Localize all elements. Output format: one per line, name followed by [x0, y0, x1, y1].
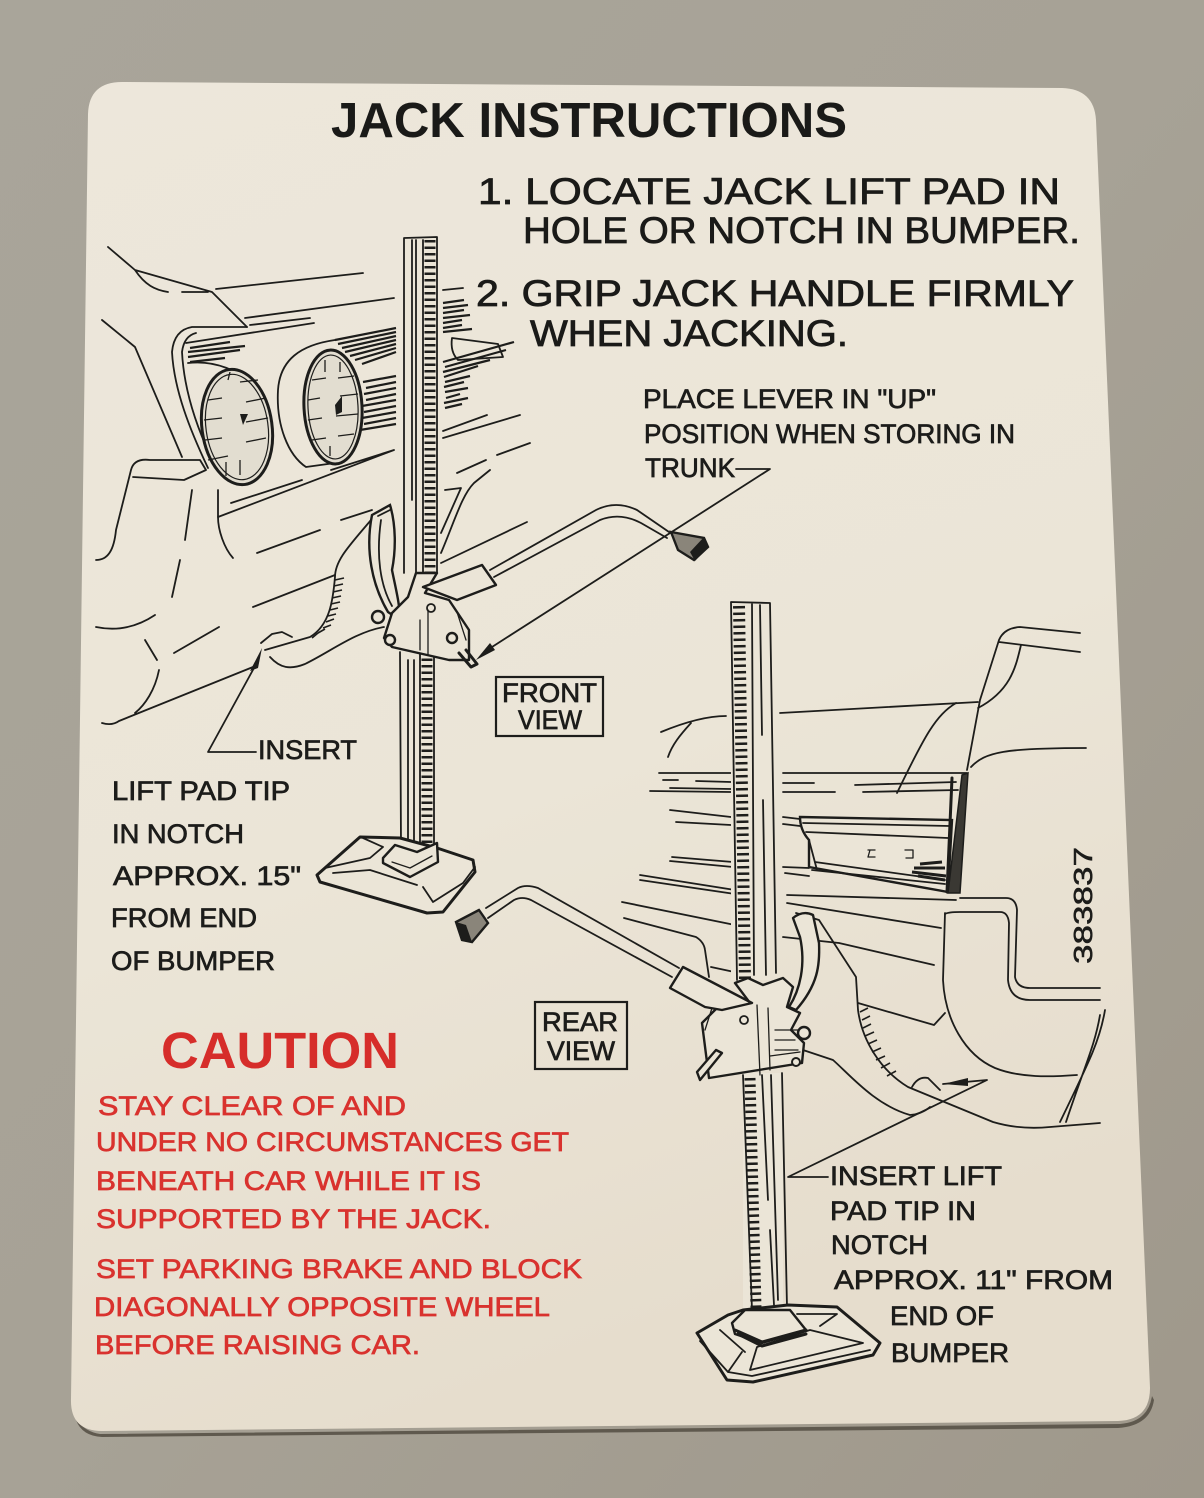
- illustration: front jack: [317, 237, 708, 913]
- text block: front insert note: APPROX. 15": [113, 861, 301, 891]
- text block: caution warning: BEFORE RAISING CAR.: [95, 1330, 420, 1360]
- illustration: front of car: [96, 247, 530, 724]
- release lever: [697, 1050, 722, 1080]
- label: place lever: PLACE LEVER IN "UP": [643, 384, 936, 414]
- jack foot: [317, 837, 475, 913]
- text block: front insert note: INSERT: [258, 735, 357, 765]
- label: rear view: VIEW: [547, 1036, 615, 1066]
- illustration: rear of car: [622, 627, 1105, 1128]
- jack pawl: [369, 505, 400, 620]
- heading: caution: CAUTION: [161, 1022, 399, 1079]
- jack pawl: [789, 913, 819, 1010]
- text block: caution warning: DIAGONALLY OPPOSITE WHEEL: [94, 1292, 550, 1322]
- jack body: [702, 978, 804, 1078]
- illustration: housing and headlights: [188, 340, 365, 489]
- text block: instructions: 1. LOCATE JACK LIFT PAD IN: [478, 171, 1060, 212]
- card shadow: [76, 1396, 1154, 1437]
- text block: rear insert note: BUMPER: [891, 1338, 1009, 1368]
- part number: 383837: [1068, 847, 1098, 964]
- text block: rear insert note: [830, 1161, 1113, 1368]
- text block: caution warning: SUPPORTED BY THE JACK.: [96, 1204, 491, 1234]
- text block: caution warning: STAY CLEAR OF AND: [98, 1091, 406, 1121]
- title: JACK INSTRUCTIONS: [331, 94, 847, 148]
- text block: rear insert note: END OF: [890, 1301, 994, 1331]
- text block: rear insert note: PAD TIP IN: [830, 1196, 976, 1226]
- label: front view: [496, 677, 603, 736]
- jack body: [384, 573, 469, 660]
- label: place lever: [643, 384, 1015, 483]
- illustration: tail lamp: [800, 773, 968, 893]
- text block: rear insert note: INSERT LIFT: [830, 1161, 1002, 1191]
- illustration: fender hatching: [312, 578, 896, 1076]
- text block: instructions: HOLE OR NOTCH IN BUMPER.: [523, 210, 1080, 251]
- text block: front insert note: OF BUMPER: [111, 946, 275, 976]
- illustration: rear jack: [456, 602, 880, 1382]
- label: front view: FRONT: [502, 678, 597, 708]
- text block: front insert note: [111, 735, 357, 976]
- text block: front insert note: FROM END: [111, 903, 257, 933]
- arrow: insert callout: [208, 648, 262, 752]
- arrow: lever callout: [476, 469, 770, 660]
- label: rear view: [535, 1002, 627, 1069]
- label: front view: VIEW: [518, 705, 582, 735]
- jack handle: [423, 565, 496, 600]
- text block: front insert note: LIFT PAD TIP: [112, 776, 290, 806]
- text block: caution warning: UNDER NO CIRCUMSTANCES GET: [96, 1127, 569, 1157]
- text block: instructions: WHEN JACKING.: [530, 313, 848, 354]
- text block: front insert note: IN NOTCH: [112, 819, 244, 849]
- text block: rear insert note: APPROX. 11" FROM: [834, 1265, 1113, 1295]
- illustration: grille hatching: [188, 300, 514, 430]
- text block: caution warning: BENEATH CAR WHILE IT IS: [96, 1166, 481, 1196]
- arrow: rear insert callout: [788, 1078, 987, 1177]
- jack post: [400, 237, 437, 846]
- jack foot: [697, 1305, 880, 1382]
- text block: rear insert note: NOTCH: [831, 1230, 928, 1260]
- text block: caution warning: [94, 1091, 582, 1360]
- release lever: [459, 650, 477, 667]
- label: place lever: TRUNK: [645, 453, 735, 483]
- text block: instructions: [476, 171, 1080, 354]
- label: place lever: POSITION WHEN STORING IN: [644, 419, 1015, 449]
- jack handle: [670, 967, 752, 1010]
- label: rear view: REAR: [542, 1007, 618, 1037]
- text block: caution warning: SET PARKING BRAKE AND BLOCK: [96, 1254, 582, 1284]
- text block: instructions: 2. GRIP JACK HANDLE FIRMLY: [476, 273, 1074, 314]
- jack post: [731, 602, 787, 1311]
